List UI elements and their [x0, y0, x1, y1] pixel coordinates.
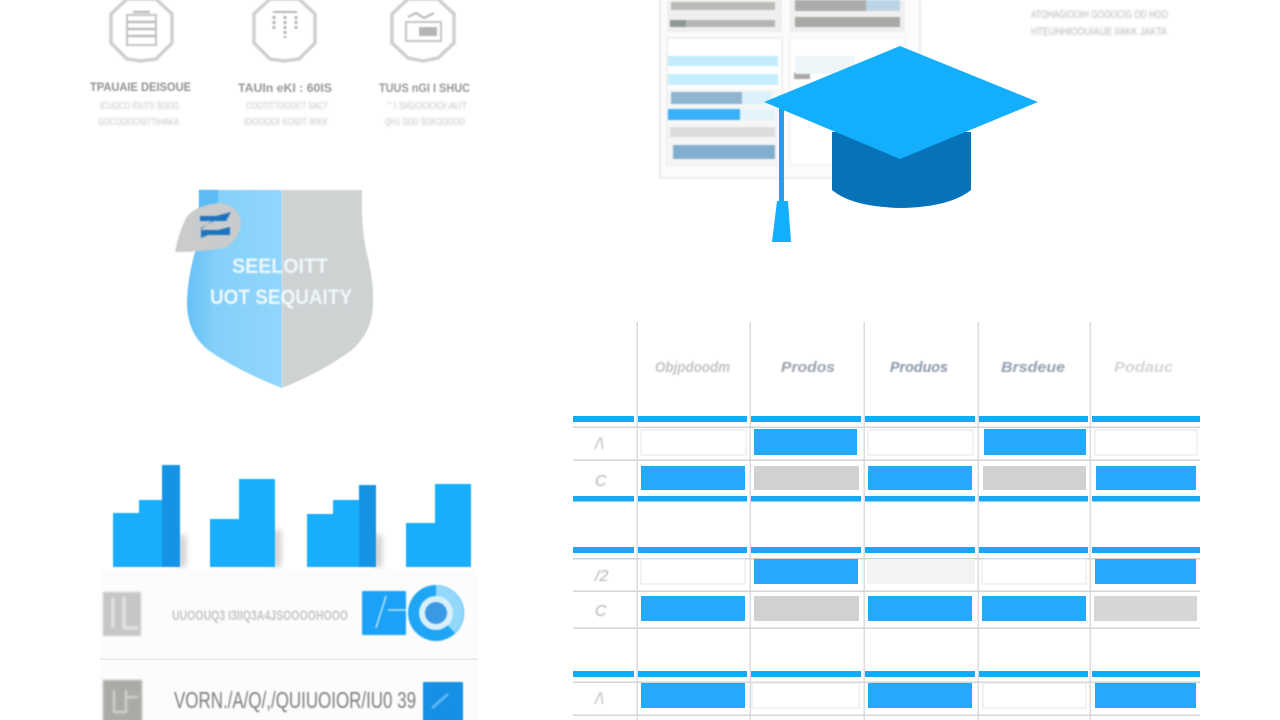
bar chart	[113, 465, 471, 567]
panel: comparison table	[573, 322, 1200, 720]
shield title: UOT SEQUAITY	[210, 286, 352, 309]
cap body	[832, 132, 971, 208]
table section 3 cells	[641, 683, 1196, 708]
column dividers	[636, 322, 1091, 720]
horizontal rules	[573, 426, 1200, 716]
table headers: Podauc	[1114, 359, 1174, 376]
feature description: QH1 DDD SOKOOOOO	[385, 117, 465, 128]
feature description: IDOOOOI KOIDT IKKK	[244, 117, 328, 128]
table headers: Produos	[890, 359, 948, 376]
panel: document dashboard	[660, 0, 920, 178]
feature heading: TAUIn eKI : 60IS	[238, 81, 332, 95]
bar shadows	[178, 530, 382, 567]
icon: clipboard octagon	[111, 0, 172, 61]
row labels	[594, 436, 608, 708]
table headers: Prodos	[781, 359, 835, 376]
icon: row 2 grey tile	[103, 680, 142, 720]
table headers	[655, 359, 1174, 376]
lower left module	[667, 38, 782, 165]
icon: badge glyph	[200, 212, 231, 238]
feature: columns	[238, 0, 332, 128]
bar group 4	[406, 484, 471, 567]
row labels: /\	[594, 691, 604, 708]
feature heading: TUUS nGI I SHUC	[379, 81, 470, 95]
feature: clipboard	[90, 0, 191, 128]
text block: top right note	[1031, 9, 1168, 38]
bar group 2	[210, 479, 275, 567]
shield left accent	[199, 190, 218, 210]
feature: dashboard	[379, 0, 470, 128]
feature description	[385, 101, 467, 128]
panel: list rows	[100, 570, 478, 720]
icon: columns octagon	[254, 0, 315, 61]
panel: three feature icons	[90, 0, 470, 128]
shield left half	[187, 190, 282, 388]
icon: graduation cap	[764, 46, 1038, 242]
panel: security shield	[175, 190, 373, 388]
icon: row 2 blue tile	[423, 682, 463, 720]
feature heading: TPAUAIE DEISOUE	[90, 80, 191, 94]
feature description: COOTITTOGOCT SACT	[246, 101, 328, 112]
bar group 3	[307, 485, 376, 567]
top right module	[790, 0, 905, 32]
lower right module	[790, 38, 905, 165]
text block: top right note: ATOHAGIOOIH GOOOCIG OD HOO	[1031, 9, 1168, 21]
text block: top right note: HTEUHHIOOUIAIJE IIAKK JAKTA	[1031, 26, 1168, 38]
list row 2	[103, 680, 463, 720]
feature description	[244, 101, 328, 128]
shield title: SEELOITT	[232, 255, 328, 278]
row labels: C	[595, 473, 607, 490]
shield right half	[282, 190, 373, 388]
table headers: Objpdoodm	[655, 359, 730, 376]
top left module	[667, 0, 782, 32]
badge	[175, 203, 241, 252]
feature description: ICUOCO IDUTS SOOO	[100, 101, 179, 112]
icon: row 1 grey tile	[103, 592, 141, 636]
bar group 1	[113, 465, 180, 567]
tassel cord	[779, 108, 784, 202]
document frame	[660, 0, 920, 178]
table section 2 cells	[641, 559, 1197, 621]
shield title	[210, 255, 352, 309]
blue bands	[573, 416, 1200, 677]
table section 1 cells	[641, 429, 1197, 490]
icon: row 1 blue tile	[362, 591, 406, 635]
row labels: /2	[594, 568, 608, 585]
row 1 text: UUOOUQ3 I3IIQ3A4JSOOOOHOOO	[172, 607, 348, 623]
feature description	[98, 101, 179, 128]
list row 1	[103, 585, 464, 641]
table headers: Brsdeue	[1001, 359, 1065, 376]
row 2 text: VORN./A/Q/,/QUIUOIOR/IU0 39	[174, 687, 416, 713]
feature description: " I SIGOOOOI AUT	[388, 101, 467, 112]
mortarboard	[764, 46, 1038, 159]
row labels: C	[595, 603, 607, 620]
tassel	[772, 201, 791, 242]
row labels: /\	[594, 436, 604, 453]
icon: dashboard octagon	[392, 0, 454, 61]
feature description: GOCOOOOSITTIHAKA	[98, 117, 179, 128]
icon: row 1 ring	[408, 585, 464, 641]
